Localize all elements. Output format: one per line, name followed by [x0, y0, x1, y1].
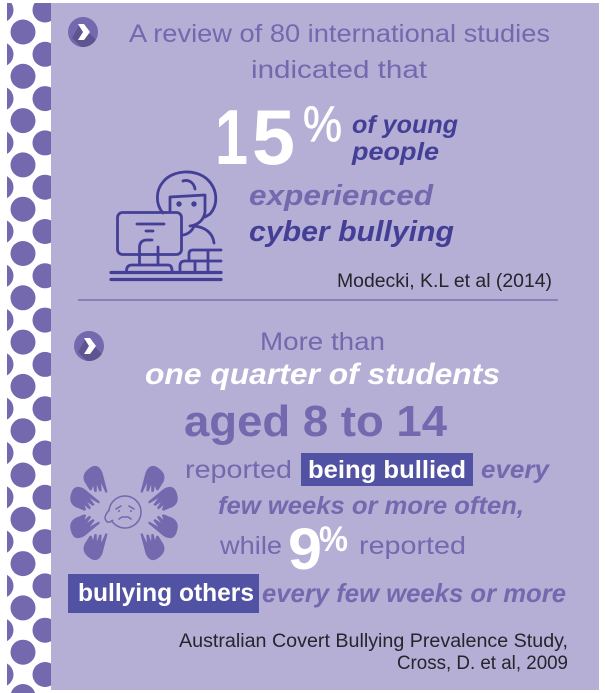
- icon: sad face surrounded by pointing hands: [67, 463, 181, 563]
- text: of young people: [351, 111, 458, 166]
- text: while: while: [219, 532, 282, 560]
- text: aged 8 to 14: aged 8 to 14: [184, 397, 448, 446]
- text: experienced cyber bullying: cyber bullying: [249, 216, 454, 248]
- icon: first bullet chevron: [68, 17, 98, 50]
- text: experienced cyber bullying: [249, 180, 454, 248]
- text: reported: reported: [185, 456, 292, 484]
- polka dot side strip: [7, 3, 51, 693]
- text: every few weeks or more often: [218, 456, 550, 520]
- text: of young people: people: [351, 138, 439, 166]
- statistic: 15 percent: 1: [215, 93, 248, 181]
- highlight: bullying others: [68, 574, 259, 613]
- text: every few weeks or more: every few weeks or more: [262, 578, 566, 608]
- highlight: bullying others: bullying others: [78, 579, 254, 607]
- text: reported: reported: [359, 532, 466, 560]
- source: Australian Covert Bullying Prevalence Study: Australian Covert Bullying Prevalence Study,: [179, 631, 568, 652]
- statistic: 15 percent: %: [303, 96, 342, 152]
- text: more than: More than: [260, 328, 385, 356]
- icon: person at computer: [111, 172, 221, 280]
- statistic: 15 percent: [215, 93, 342, 181]
- statistic: 15 percent: 5: [252, 93, 295, 181]
- text: experienced cyber bullying: experienced: [249, 180, 434, 212]
- source: Australian Covert Bullying Prevalence Study: [179, 631, 568, 674]
- text: every few weeks or more often: few weeks or more often,: [218, 492, 524, 520]
- statistic: 9 percent: %: [319, 520, 348, 559]
- intro text: review of studies: indicated that: [251, 56, 427, 84]
- text: of young people: of young: [352, 111, 458, 139]
- statistic: 9 percent: [288, 517, 348, 582]
- intro text: review of studies: A review of 80 international studies: [129, 20, 550, 48]
- text: one quarter of students: one quarter of students: [145, 358, 500, 391]
- intro text: review of studies: [129, 20, 550, 84]
- source: Modecki: Modecki, K.L et al (2014): [337, 271, 552, 292]
- icon: second bullet chevron: [74, 331, 104, 364]
- source: Australian Covert Bullying Prevalence Study: Cross, D. et al, 2009: [397, 653, 568, 674]
- statistic: 9 percent: 9: [288, 517, 322, 582]
- highlight: being bullied: being bullied: [308, 456, 466, 484]
- text: every few weeks or more often: every: [481, 456, 550, 484]
